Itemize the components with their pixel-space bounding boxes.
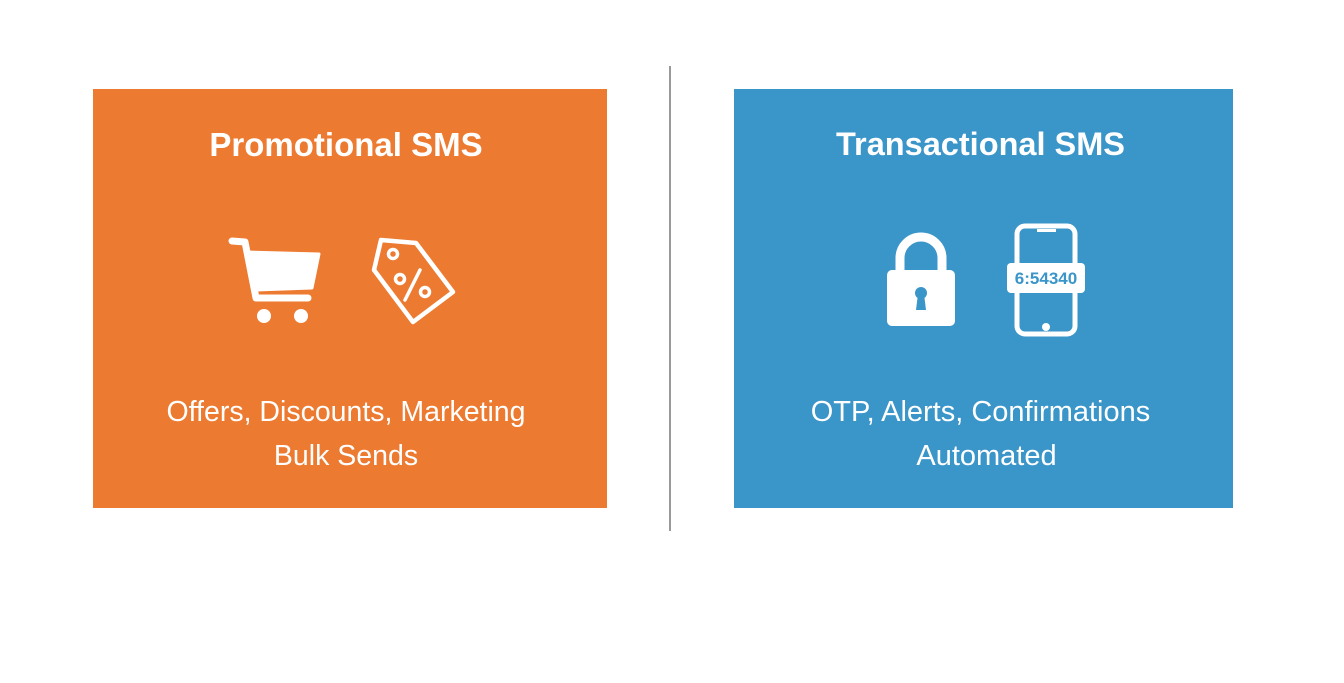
text: transactional details: OTP, Alerts, Confirmations (811, 396, 1150, 428)
icons: lock and phone (887, 224, 1085, 336)
text: transactional details (811, 396, 1150, 472)
icon: phone with code (1007, 226, 1085, 334)
text: promotional details (166, 396, 526, 472)
heading: transactional: Transactional SMS (836, 126, 1125, 162)
icon: lock (887, 237, 955, 326)
heading: promotional: Promotional SMS (209, 126, 483, 163)
panel: promotional (93, 89, 607, 508)
icon: phone with code: 6:54340 (1015, 269, 1077, 288)
text: transactional details: Automated (916, 440, 1057, 472)
text: promotional details: Offers, Discounts, Marketing (166, 396, 526, 428)
icon: cart (232, 241, 319, 323)
icons: cart and tag (228, 238, 456, 324)
text: promotional details: Bulk Sends (274, 440, 418, 472)
panel: transactional (734, 89, 1233, 508)
icon: tag (374, 240, 453, 322)
divider (669, 66, 671, 531)
